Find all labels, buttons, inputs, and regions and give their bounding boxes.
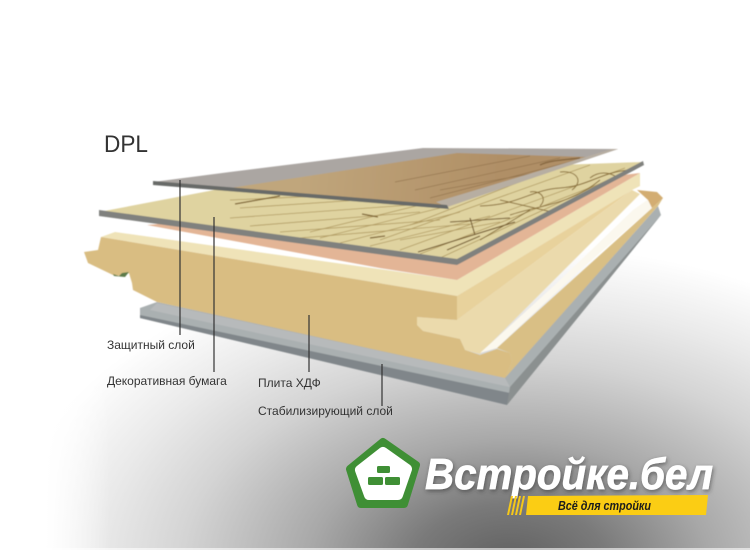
label: stabilising layer: Стабилизирующий слой — [258, 404, 393, 418]
decorative paper layer — [99, 161, 644, 265]
pink adhesive layer — [147, 173, 640, 280]
logo yellow tagline bar — [507, 495, 708, 515]
infographic: DPL laminate layers — [76, 136, 750, 550]
leader line: protective layer — [179, 180, 181, 335]
label: decorative paper: Декоративная бумага — [107, 374, 227, 388]
logo icon: green pentagon house with bricks — [350, 442, 416, 504]
logo wordmark: Встройке.бел — [425, 450, 713, 499]
HDF core board — [84, 173, 663, 378]
label: protective layer: Защитный слой — [107, 338, 195, 352]
logo tagline: Всё для стройки — [558, 499, 651, 513]
leader line: decorative paper — [213, 217, 215, 372]
stabilising bottom layer — [140, 206, 661, 405]
title: DPL — [104, 131, 148, 158]
label: HDF board: Плита ХДФ — [258, 376, 321, 390]
protective film layer — [153, 148, 618, 209]
leader line: stabilising layer — [381, 364, 383, 406]
leader line: HDF — [308, 315, 310, 372]
laminate board illustration — [84, 148, 663, 405]
logo — [350, 442, 713, 515]
